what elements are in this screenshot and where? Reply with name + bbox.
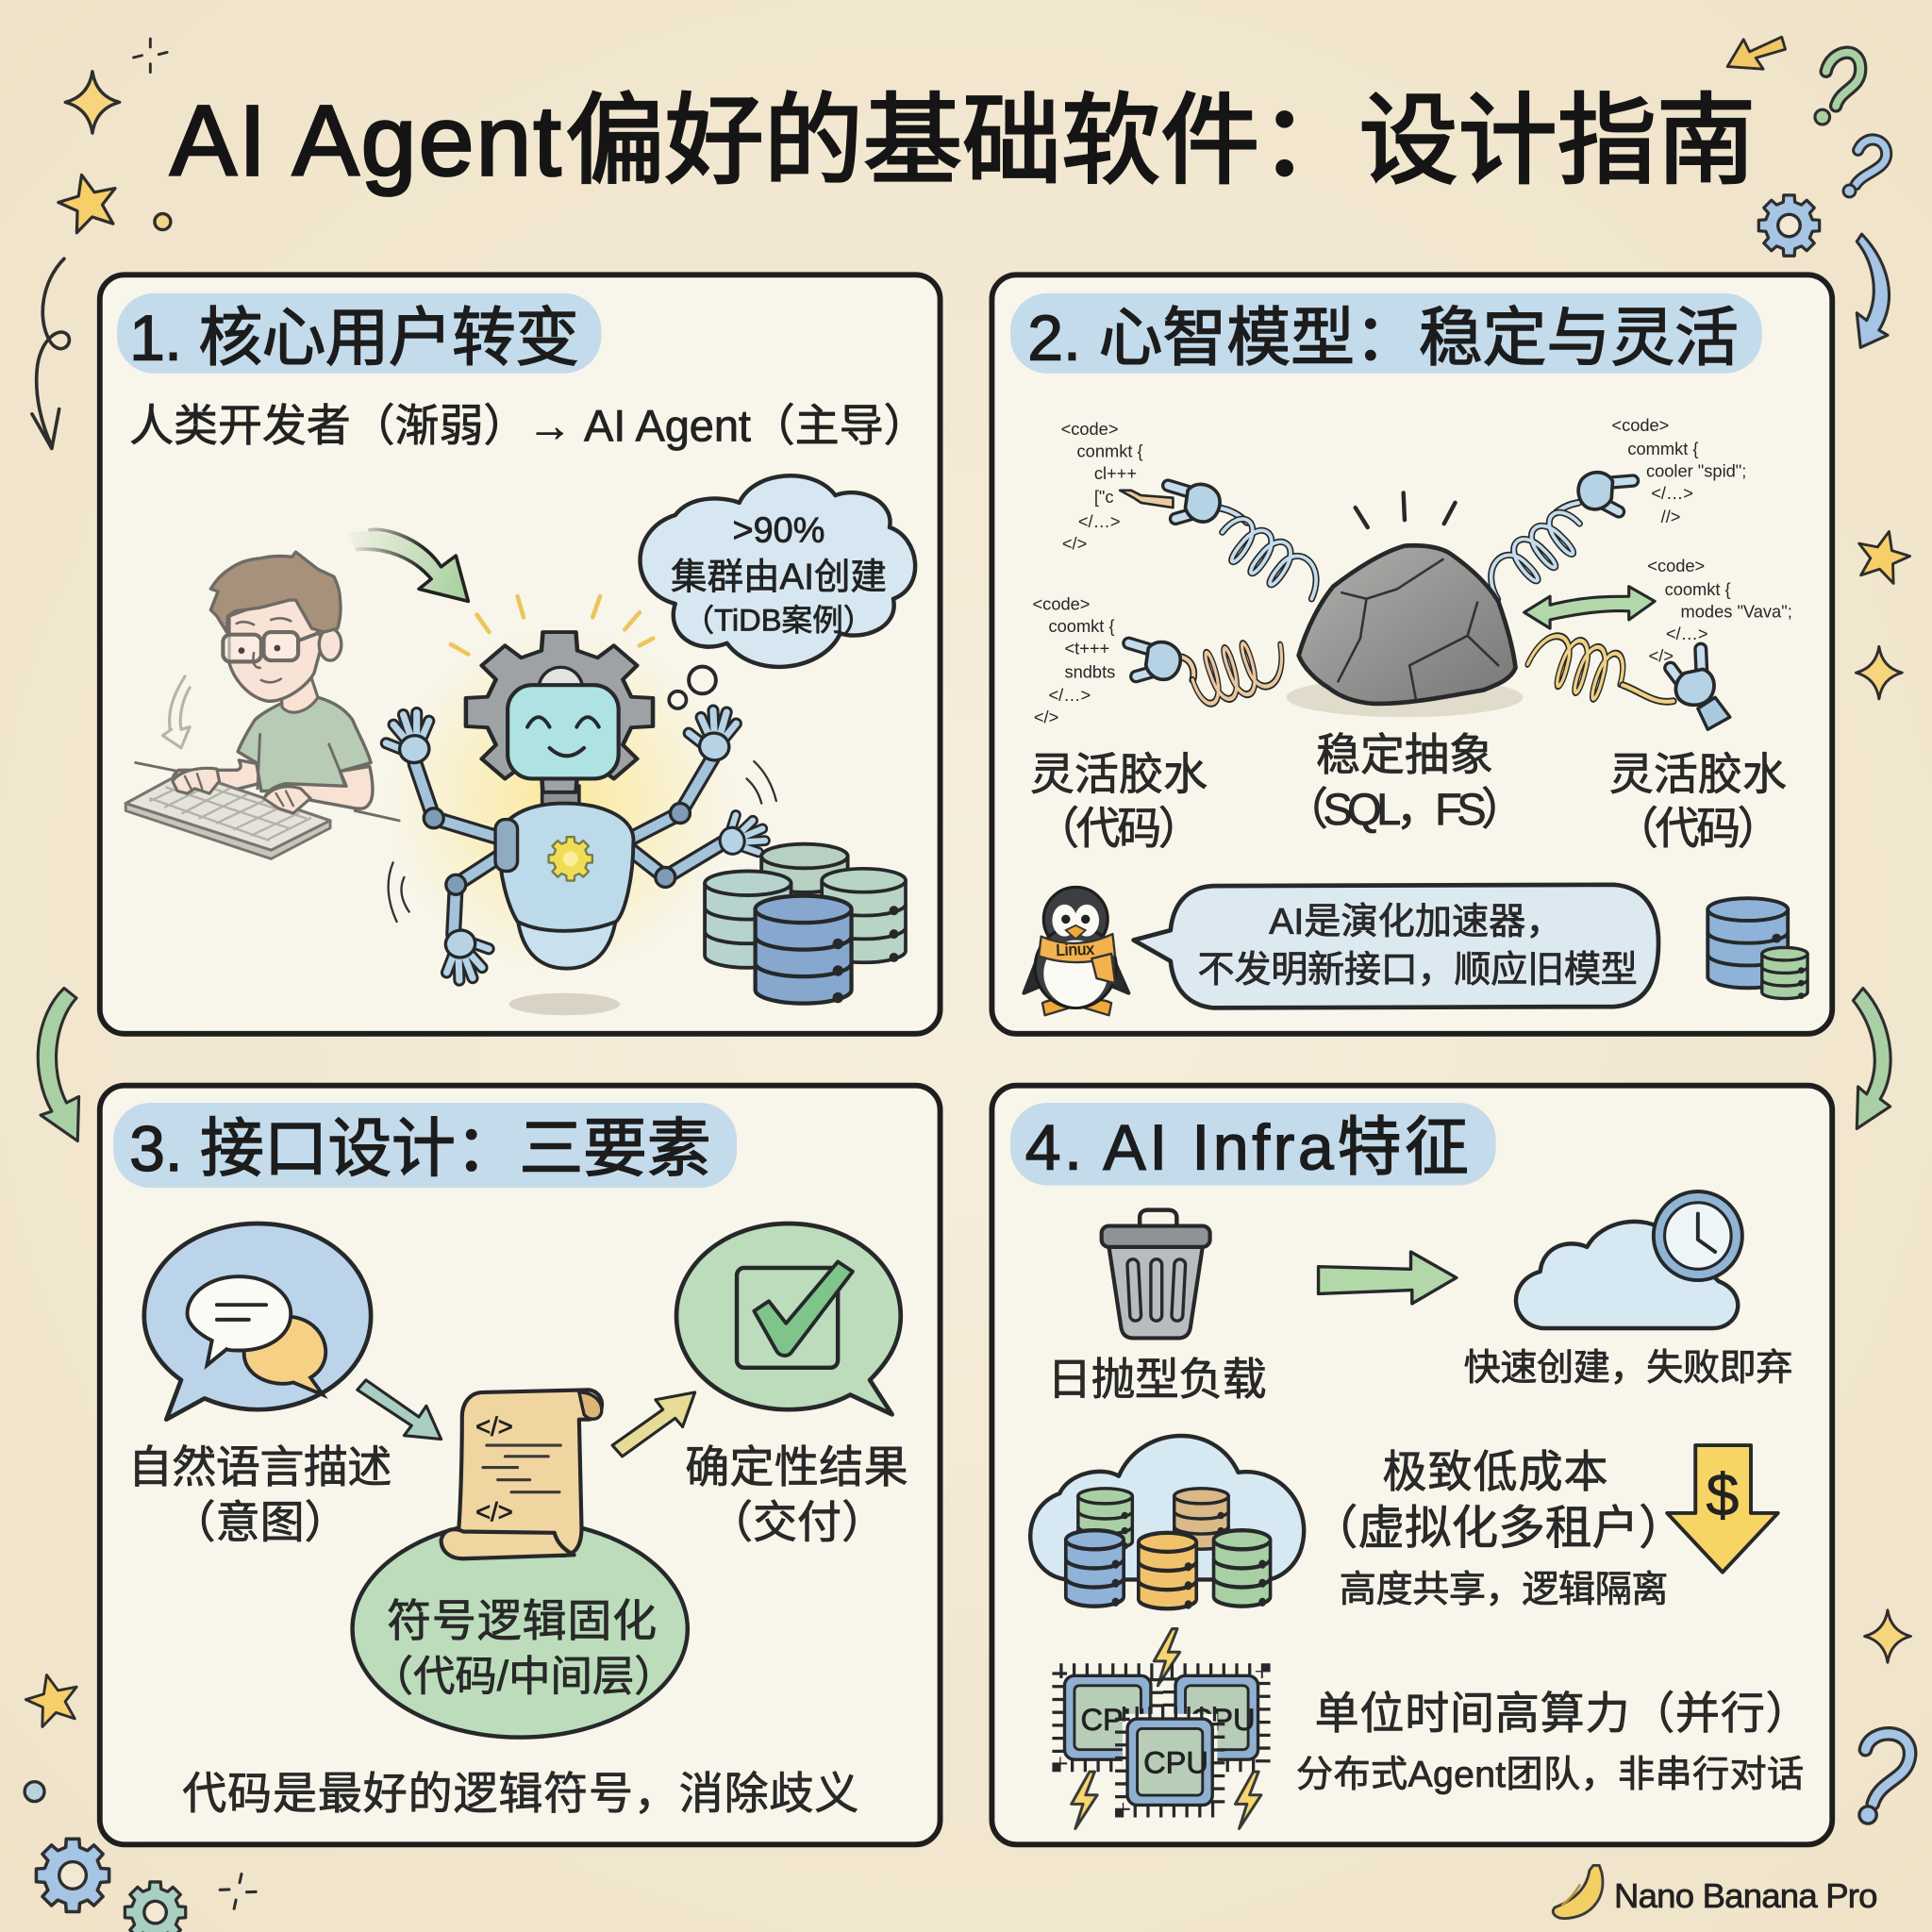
code snippet: left: <t+++ [1064,639,1109,658]
label: flexible glue left [1030,749,1208,854]
panel 2: mental model [991,275,1832,1034]
code snippet: right: </…> [1666,624,1708,643]
label: extreme low cost: 极致低成本 [1382,1446,1607,1496]
thought cloud: 90% of clusters: 集群由AI创建 [671,557,887,597]
label: fast create and discard: 快速创建，失败即弃 [1464,1348,1792,1389]
arrow: left green curved arrow [38,989,79,1141]
arrow: green right [1319,1252,1457,1304]
subtitle: 人类开发者（渐弱）→ AI Agent（主导） [129,401,928,451]
rock: stable abstraction [1287,492,1523,717]
thought cloud: 90% of clusters: >90% [733,511,824,551]
code snippet: right: coomkt { [1665,579,1731,599]
thought bubbles [669,667,716,708]
label: extreme low cost [1311,1446,1686,1610]
label: stable abstraction [1284,729,1525,834]
ellipse: symbolic logic: 符号逻辑固化 [387,1596,657,1646]
code snippet: right [1647,556,1792,665]
label: extreme low cost: 高度共享，逻辑隔离 [1340,1570,1668,1610]
label: deterministic result [685,1441,908,1547]
thought cloud: 90% of clusters: （TiDB案例） [684,603,874,638]
label: high compute per time: 分布式Agent团队，非串行对话 [1296,1755,1804,1795]
label: stable abstraction: 稳定抽象 [1316,729,1493,779]
speech bubble: AI is an accelerator: AI是演化加速器， [1269,902,1563,942]
code snippet: left [1033,594,1115,727]
code snippet: top right: </…> [1651,483,1693,503]
illustration: glowing robot agent [382,596,776,1015]
panel 1: core user shift [100,275,941,1034]
panel 3: interface design [100,1086,941,1844]
icon: CPU cluster with lightning: CPU [1191,1702,1256,1737]
label: natural language description: （意图） [172,1497,349,1547]
code snippet: right: </> [1649,645,1674,665]
code snippet: top left: </…> [1078,511,1121,531]
icon: Linux penguin [1024,887,1128,1015]
arrow: top right blue curved arrow [1857,234,1889,347]
code snippet: top right: <code> [1611,415,1669,435]
icon: code scroll: </> [475,1412,513,1441]
decorations: right side stars [1852,525,1914,1662]
heading 3 highlight and text: 3. 接口设计：三要素 [129,1114,711,1185]
bubble: deterministic result [676,1224,901,1414]
icon: cloud with tenant databases [1030,1436,1304,1608]
panel 4: AI infra traits [991,1086,1832,1844]
caption: 代码是最好的逻辑符号，消除歧义 [182,1768,858,1818]
speech bubble: AI is an accelerator [1134,885,1658,1008]
title: AI Agent [170,85,563,196]
title: 偏好的基础软件：设计指南 [566,86,1756,196]
label: high compute per time: 单位时间高算力（并行） [1315,1688,1810,1738]
code snippet: top right: //> [1661,507,1680,526]
heading 2 highlight and text: 2. 心智模型：稳定与灵活 [1027,303,1739,374]
label: stable abstraction: （SQL，FS） [1284,784,1525,834]
icon: databases [1707,898,1807,999]
code snippet: left: coomkt { [1049,616,1115,636]
icon: Linux penguin: Linux [1056,941,1095,959]
icon: CPU cluster with lightning [1059,1629,1263,1828]
code snippet: top right: cooler "spid"; [1646,460,1746,480]
icon: banana [1553,1865,1603,1919]
decorations: bottom left star, dot, gears [22,1669,258,1932]
icon: cloud with clock [1516,1191,1742,1328]
arrow: to code [358,1380,441,1440]
label: natural language description [128,1441,391,1547]
code snippet: left: </> [1034,708,1058,727]
icon: database stack [705,844,906,1004]
icon: dollar down arrow: $ [1707,1463,1739,1529]
arrow: to result [612,1392,695,1457]
watermark text: Nano Banana Pro [1614,1876,1878,1915]
icon: dollar down arrow [1667,1445,1778,1573]
speech bubble: AI is an accelerator: 不发明新接口，顺应旧模型 [1198,950,1638,991]
decorations: top left stars [53,39,171,236]
label: natural language description: 自然语言描述 [128,1441,391,1491]
thought cloud: 90% of clusters [641,475,915,667]
code snippet: left: <code> [1033,594,1090,614]
label: flexible glue right [1609,749,1787,854]
code snippet: left: </…> [1049,685,1091,705]
code snippet: top left: cl+++ [1094,463,1137,483]
arrow: human to agent [349,529,468,601]
code snippet: top left [1061,419,1143,554]
arrow: left loop arrow [32,258,69,448]
code snippet: top left: <code> [1061,419,1119,439]
arrow: green double arrow [1524,587,1655,628]
label: disposable workloads: 日抛型负载 [1047,1355,1267,1405]
label: extreme low cost: （虚拟化多租户） [1311,1502,1686,1555]
icon: CPU cluster with lightning: CPU [1080,1702,1145,1737]
ellipse: symbolic logic: （代码/中间层） [372,1654,676,1700]
label: high compute per time [1296,1688,1810,1795]
code snippet: top left: conmkt { [1077,441,1143,461]
icon: trash can [1102,1210,1210,1338]
label: flexible glue left: （代码） [1035,804,1203,854]
code snippet: top left: ["c [1094,487,1114,507]
code snippet: right: modes "Vava"; [1681,601,1792,621]
decorations: top right arrow, question marks and gear [1727,37,1887,256]
icon: code scroll: </> [475,1497,513,1526]
arrow: right green curved arrow [1853,989,1890,1128]
label: flexible glue right: 灵活胶水 [1609,749,1787,799]
code snippet: right: <code> [1647,556,1705,575]
label: flexible glue left: 灵活胶水 [1030,749,1208,799]
icon: CPU cluster with lightning: CPU [1143,1745,1208,1780]
springs and robot hands: flexible glue [1120,469,1730,729]
label: deterministic result: （交付） [708,1497,886,1547]
code snippet: top right [1611,415,1746,526]
label: deterministic result: 确定性结果 [685,1441,908,1491]
decoration: blue question mark [1859,1734,1910,1824]
illustration: human developer [125,552,399,858]
icon: code scroll [441,1390,602,1558]
bubble: natural language [144,1224,371,1420]
ellipse: symbolic logic [353,1521,688,1738]
code snippet: left: sndbts [1064,661,1115,681]
heading 1 highlight and text: 1. 核心用户转变 [129,303,579,374]
code snippet: top right: commkt { [1627,439,1698,458]
label: flexible glue right: （代码） [1614,804,1782,854]
code snippet: top left: </> [1062,534,1087,554]
heading 4 highlight and text: 4. AI Infra特征 [1025,1113,1469,1184]
